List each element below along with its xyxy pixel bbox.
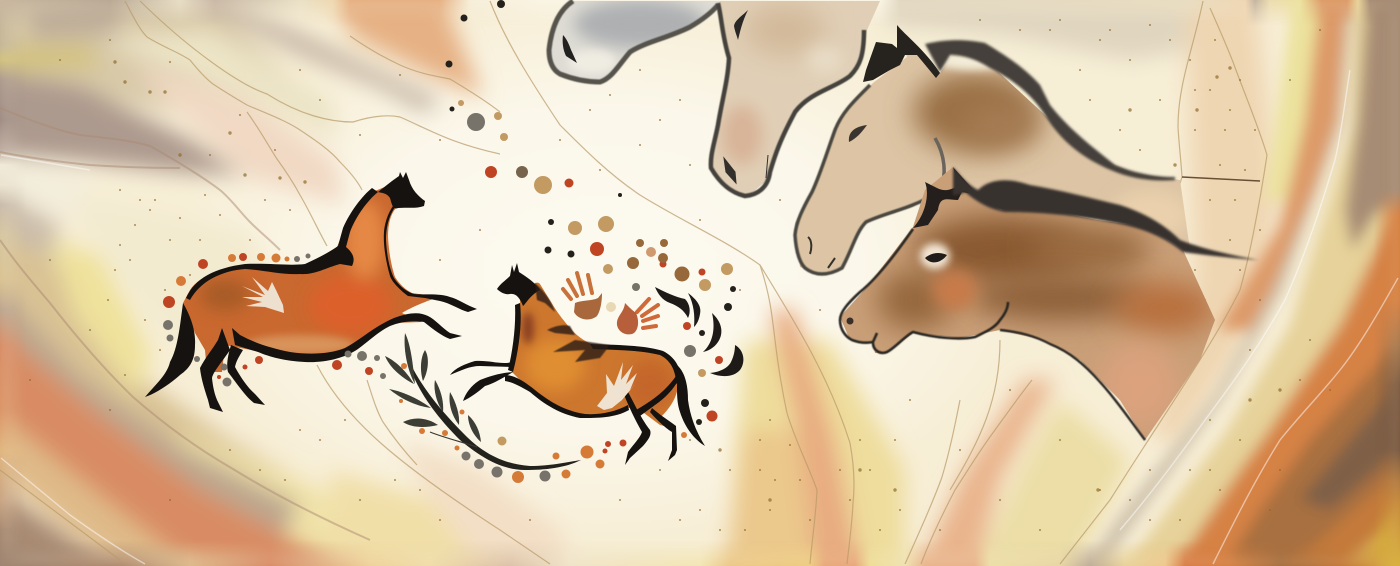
horse: orange, leaping left [145, 172, 477, 412]
leaves [385, 333, 481, 442]
hind legs [200, 328, 265, 412]
nostril and mouth [724, 155, 768, 183]
horse: orange, leaping right [450, 263, 705, 465]
eye [925, 253, 947, 262]
tail [677, 365, 705, 446]
brush marks and crescent [655, 287, 743, 376]
stencil left [563, 273, 602, 319]
handprint [242, 277, 284, 313]
head [378, 172, 425, 208]
edge wash: top [4, 0, 1396, 22]
orange dots [176, 253, 687, 483]
belly line [505, 303, 629, 418]
belly and second front leg [232, 313, 462, 362]
curved ear mark [935, 138, 944, 190]
hind legs [623, 375, 681, 465]
back and mane [186, 188, 378, 300]
back line [590, 344, 681, 384]
mane [925, 40, 1175, 180]
edge wash: right [1376, 4, 1400, 564]
front legs [450, 361, 513, 401]
eye [734, 10, 748, 40]
ears and forelock [913, 167, 978, 228]
tan dots [458, 100, 733, 446]
head [497, 263, 540, 306]
eye [849, 125, 867, 142]
red dots [163, 166, 723, 454]
handprint [597, 362, 637, 410]
black dots [446, 0, 736, 425]
mane [953, 167, 1258, 260]
horse: tan, behind [790, 20, 1260, 280]
horse: grey, top [546, 0, 720, 86]
neck stripes [535, 283, 610, 362]
ears [863, 25, 940, 82]
nostril [846, 318, 854, 324]
nostril [808, 237, 835, 268]
chest and front leg [384, 206, 477, 312]
horse: beige, top [700, 0, 890, 200]
dots: pigment circles [163, 0, 736, 483]
stencil right [617, 299, 658, 334]
edge wash: bottom [3, 543, 1398, 566]
hand stencils [563, 273, 658, 334]
brown dots [516, 166, 690, 282]
thick tan cracks [0, 108, 370, 540]
grey dots [163, 113, 696, 482]
horse: brown, front [830, 165, 1258, 445]
tail [145, 303, 195, 397]
eye [563, 35, 577, 63]
plant sprig [385, 333, 581, 470]
edge wash: left [0, 6, 20, 563]
